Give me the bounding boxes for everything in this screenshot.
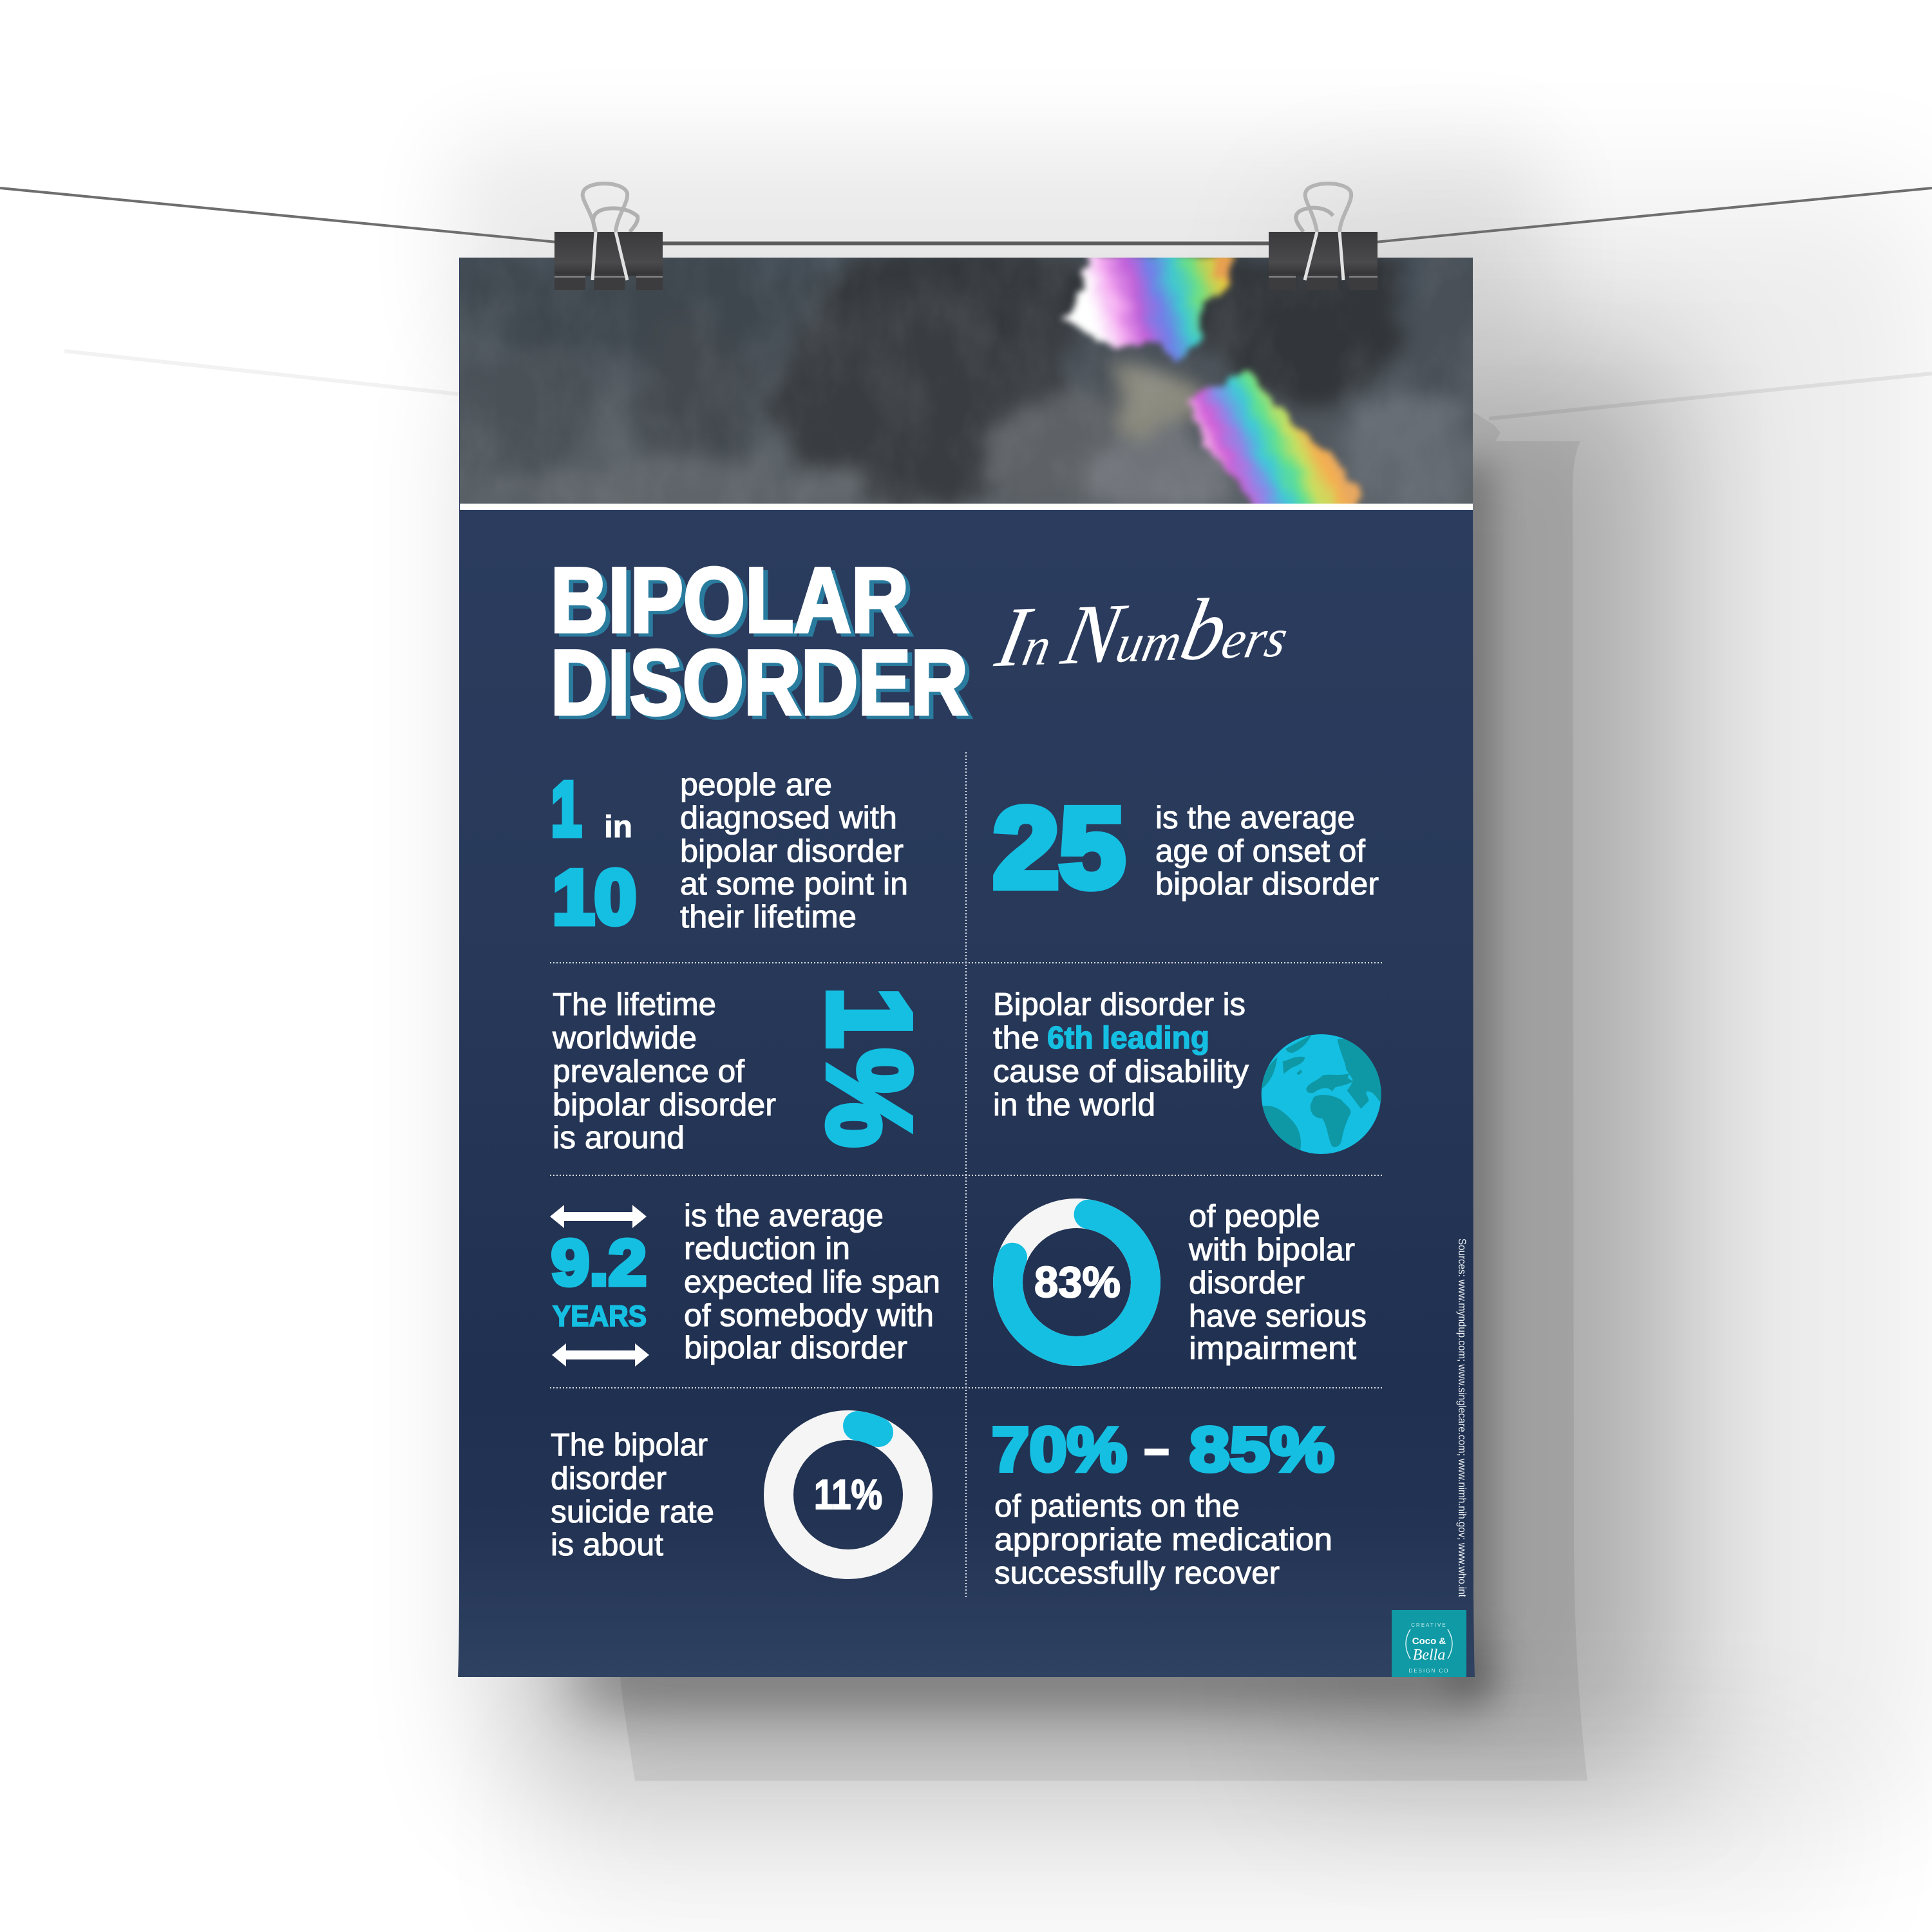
poster — [458, 245, 1475, 1677]
text: at some point in — [680, 867, 908, 902]
hanging wire — [0, 188, 1932, 243]
text — [994, 1489, 1332, 1591]
text — [684, 1198, 940, 1365]
wire shadows — [64, 351, 1932, 419]
text: disorder — [551, 1461, 667, 1496]
text: The bipolar — [551, 1428, 708, 1463]
years label: YEARS — [553, 1300, 647, 1332]
text: reduction in — [684, 1231, 850, 1266]
text: The lifetime — [553, 987, 716, 1022]
title: BIPOLAR — [551, 549, 909, 652]
white band — [460, 504, 1473, 510]
big number 1 in 10: in — [604, 810, 632, 844]
logo: Bella — [1413, 1647, 1445, 1663]
range value: 85% — [1189, 1414, 1334, 1484]
title — [551, 549, 972, 737]
text: is about — [551, 1528, 663, 1562]
text: disorder — [1189, 1265, 1305, 1300]
text: bipolar disorder — [553, 1088, 776, 1122]
text — [680, 768, 908, 934]
binder clip left — [554, 184, 663, 290]
value: 83% — [1034, 1258, 1121, 1307]
text — [993, 987, 1249, 1122]
text: bipolar disorder — [684, 1331, 907, 1365]
rotated 1%: 1% — [804, 987, 936, 1148]
title: DISORDER — [551, 632, 968, 734]
script subtitle: In Numbers — [989, 577, 1300, 685]
big number 1 in 10 — [551, 766, 636, 940]
text: the — [993, 1021, 1039, 1056]
9.2 value: 9.2 — [551, 1227, 647, 1299]
text: prevalence of — [553, 1054, 744, 1089]
rainbow upper — [1066, 254, 1235, 364]
donut chart — [1008, 1213, 1146, 1351]
logo: CREATIVE — [1411, 1622, 1447, 1628]
stat: 9.2 years — [550, 1198, 940, 1367]
stat: age 25 — [993, 785, 1379, 911]
text: of people — [1189, 1199, 1320, 1234]
text: bipolar disorder — [1155, 867, 1379, 902]
sky photo with rainbow — [460, 245, 1475, 512]
value: 11% — [814, 1471, 882, 1518]
title: BIPOLAR — [555, 553, 913, 655]
big number 25: 25 — [993, 785, 1125, 911]
text: impairment — [1189, 1331, 1356, 1366]
text: suicide rate — [551, 1495, 714, 1530]
stat: 1 in 10 — [551, 766, 908, 940]
dotted dividers — [550, 752, 1382, 1597]
stat: 11% donut — [551, 1425, 918, 1564]
text — [551, 1428, 714, 1562]
text: successfully recover — [994, 1556, 1280, 1591]
text: is around — [553, 1121, 685, 1155]
text: diagnosed with — [680, 800, 897, 835]
text — [1188, 1199, 1367, 1366]
stat: 70% - 85% — [992, 1409, 1334, 1591]
arrow bottom — [552, 1343, 649, 1367]
range value: – — [1143, 1409, 1170, 1485]
binder clip right — [1269, 184, 1378, 290]
rainbow lower — [1188, 370, 1362, 512]
icon: globe — [1260, 1034, 1383, 1154]
text: is the average — [684, 1198, 884, 1233]
text: worldwide — [552, 1021, 697, 1056]
text: 6th leading — [1047, 1021, 1209, 1056]
text: have serious — [1189, 1299, 1367, 1334]
text: their lifetime — [680, 900, 857, 934]
range value: 70% — [992, 1414, 1127, 1484]
stat: 6th leading cause — [993, 987, 1383, 1154]
text: bipolar disorder — [680, 834, 904, 869]
poster sheet — [458, 258, 1475, 1677]
text — [1155, 800, 1379, 902]
text: of patients on the — [994, 1489, 1240, 1524]
logo — [1392, 1610, 1466, 1677]
text: of somebody with — [684, 1298, 934, 1333]
title: DISORDER — [555, 635, 972, 737]
range value — [992, 1409, 1334, 1485]
sources: Sources: www.myndup.com; www.singlecare.com; www.nimh.nih.gov; www.who.int — [1456, 1238, 1468, 1597]
stat: 83% donut — [1008, 1199, 1367, 1366]
donut chart — [779, 1425, 918, 1564]
text: cause of disability — [993, 1054, 1249, 1089]
logo: DESIGN CO — [1409, 1668, 1449, 1674]
text: people are — [680, 768, 832, 802]
arrow top — [550, 1205, 647, 1228]
text: appropriate medication — [994, 1522, 1332, 1557]
text: is the average — [1155, 800, 1355, 835]
text: with bipolar — [1188, 1233, 1355, 1267]
big number 1 in 10: 10 — [553, 855, 636, 940]
logo: Coco & — [1412, 1636, 1446, 1647]
big number 1 in 10: 1 — [551, 766, 582, 852]
text: age of onset of — [1155, 834, 1365, 869]
stat: lifetime prevalence 1% — [552, 987, 936, 1155]
text: Bipolar disorder is — [993, 987, 1245, 1022]
text: in the world — [993, 1088, 1155, 1122]
poster cast shadow — [580, 412, 1587, 1781]
text — [552, 987, 776, 1155]
text: expected life span — [684, 1265, 940, 1300]
